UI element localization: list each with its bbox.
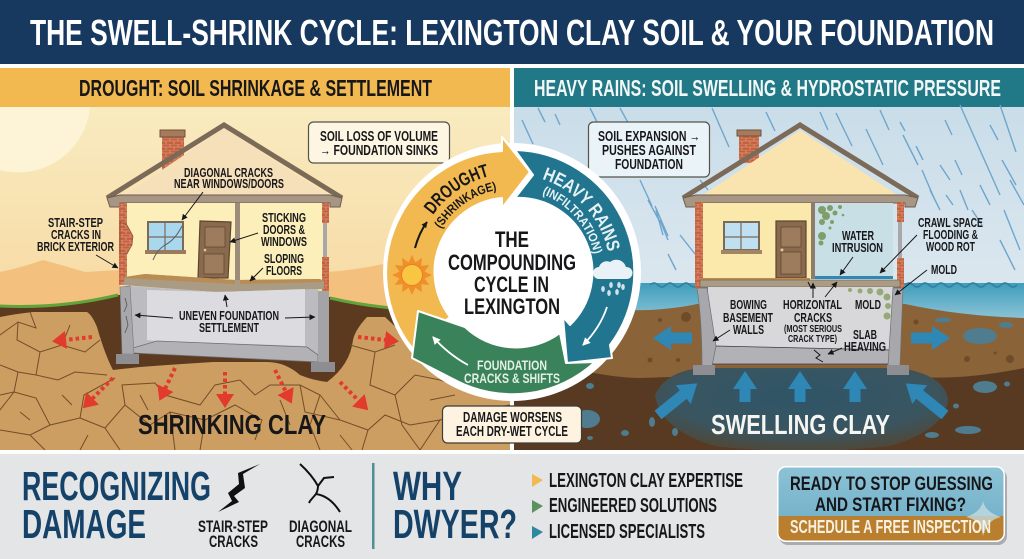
icon: diagonal crack: DIAGONAL	[289, 517, 352, 536]
house: drought	[107, 125, 342, 372]
label: diagonal cracks	[174, 165, 284, 220]
cycle direction arrows	[415, 222, 607, 365]
arrow: drought	[387, 136, 529, 346]
chimney	[160, 130, 185, 170]
label: mold exterior: MOLD	[931, 262, 957, 277]
callout: soil expansion: FOUNDATION	[615, 157, 683, 173]
label: crawl space flooding and wood rot: FLOODING &	[923, 227, 978, 242]
floor slab	[700, 278, 900, 287]
arrow: drought: DROUGHT	[424, 164, 486, 214]
arrow: heavy rains: (INFILTRATION)	[542, 186, 602, 254]
red shrinkage arrows	[65, 337, 386, 401]
icon: diagonal crack	[289, 464, 352, 551]
icon: diagonal crack: CRACKS	[296, 532, 345, 551]
swelling clay heading: SWELLING CLAY	[711, 409, 890, 440]
brick walls	[695, 202, 904, 289]
label: uneven foundation settlement	[135, 295, 315, 335]
window	[721, 222, 762, 254]
callout: damage worsens	[442, 406, 582, 443]
callout: damage worsens: EACH DRY-WET CYCLE	[456, 424, 568, 440]
panel: heavy rains	[514, 68, 1024, 451]
bullet list	[532, 470, 743, 543]
title banner	[0, 0, 1024, 64]
icon: sun	[392, 255, 432, 295]
door	[198, 221, 231, 278]
recognizing damage heading: DAMAGE	[22, 501, 146, 547]
icon: rain cloud	[593, 260, 633, 296]
cycle center title: COMPOUNDING	[448, 250, 576, 275]
label: sticking doors and windows: STICKING	[262, 210, 306, 225]
door	[776, 221, 806, 278]
attic and roof	[683, 125, 918, 207]
panel divider	[510, 68, 514, 454]
label: uneven foundation settlement: SETTLEMENT	[199, 320, 259, 335]
label: water intrusion	[832, 228, 883, 275]
label: stair-step cracks in brick exterior: CRACKS IN	[51, 227, 101, 242]
label: horizontal cracks: (MOST SERIOUS	[784, 323, 842, 335]
label: horizontal cracks: CRACK TYPE)	[788, 333, 837, 345]
compounding cycle diagram	[383, 136, 641, 401]
callout: damage worsens: DAMAGE WORSENS	[463, 410, 562, 426]
label: uneven foundation settlement: UNEVEN FOUNDATION	[179, 308, 279, 323]
arrow: foundation cracks and shifts	[412, 311, 595, 394]
label: mold exterior	[895, 262, 957, 295]
rainy sky background	[514, 105, 1024, 307]
label: horizontal cracks	[783, 282, 842, 345]
callout: soil expansion: PUSHES AGAINST	[602, 143, 696, 159]
label: diagonal cracks: DIAGONAL CRACKS	[184, 165, 273, 180]
sloping floor	[123, 274, 324, 292]
house: heavy rains	[683, 125, 918, 375]
arrow: foundation cracks and shifts: CRACKS & SHIFTS	[464, 370, 560, 386]
why dwyer heading: DWYER?	[393, 501, 517, 547]
arrow: heavy rains	[517, 151, 634, 362]
label: sloping floors	[250, 251, 304, 281]
label: sloping floors: FLOORS	[266, 263, 302, 278]
foundation	[116, 286, 335, 372]
callout: soil loss of volume: SOIL LOSS OF VOLUME	[320, 129, 438, 145]
label: bowing basement walls	[713, 297, 773, 341]
interior walls	[127, 203, 323, 281]
label: bowing basement walls: BOWING	[730, 297, 767, 312]
label: horizontal cracks: CRACKS	[794, 310, 832, 325]
label: stair-step cracks in brick exterior	[37, 215, 118, 268]
recognizing damage heading	[22, 463, 211, 547]
chimney	[737, 130, 761, 163]
callout: soil loss of volume	[308, 122, 450, 163]
label: diagonal cracks: NEAR WINDOWS/DOORS	[174, 176, 284, 191]
label: stair-step cracks in brick exterior: BRICK EXTERIOR	[37, 239, 114, 254]
bullet list: ENGINEERED SOLUTIONS	[549, 495, 717, 517]
label: crawl space flooding and wood rot: WOOD ROT	[926, 239, 975, 254]
label: sticking doors and windows	[230, 210, 307, 249]
call to action button: AND START FIXING?	[815, 494, 966, 516]
icon: stair-step crack	[198, 464, 268, 551]
cracked clay soil	[0, 295, 510, 450]
label: sticking doors and windows: DOORS &	[263, 222, 305, 237]
icon: stair-step crack: STAIR-STEP	[198, 517, 268, 536]
bottom band	[0, 450, 1024, 559]
label: crawl space flooding and wood rot: CRAWL SPACE	[918, 215, 983, 230]
label: slab heaving	[828, 327, 886, 354]
callout: soil expansion: SOIL EXPANSION →	[598, 129, 700, 145]
cycle center title: THE	[495, 227, 529, 252]
drought panel header: DROUGHT: SOIL SHRINKAGE & SETTLEMENT	[79, 75, 432, 101]
brick walls with stair-step crack	[119, 203, 329, 291]
flooded basement	[693, 282, 909, 375]
call to action button	[777, 466, 1007, 545]
label: bowing basement walls: WALLS	[733, 322, 764, 337]
label: bowing basement walls: BASEMENT	[723, 310, 773, 325]
label: slab heaving: SLAB	[853, 327, 877, 342]
arrow: drought: (SHRINKAGE)	[434, 182, 496, 229]
bullet list: LEXINGTON CLAY EXPERTISE	[549, 470, 743, 492]
panel: drought	[0, 68, 510, 450]
blue pressure arrows	[658, 338, 945, 415]
cycle center title: LEXINGTON	[464, 294, 560, 319]
icon: stair-step crack: CRACKS	[209, 532, 258, 551]
label: sticking doors and windows: WINDOWS	[261, 234, 307, 249]
callout: soil expansion	[588, 122, 710, 177]
window with crack	[145, 222, 186, 260]
cycle center title	[448, 227, 576, 319]
label: horizontal cracks: HORIZONTAL	[783, 297, 842, 312]
label: mold basement: MOLD	[855, 297, 881, 312]
heavy rains panel header	[514, 68, 1024, 107]
why dwyer heading: WHY	[393, 463, 462, 509]
arrow: heavy rains: HEAVY RAINS	[543, 167, 620, 251]
label: stair-step cracks in brick exterior: STAIR-STEP	[48, 215, 103, 230]
cycle center title: CYCLE IN	[474, 272, 549, 297]
bullet list: LICENSED SPECIALISTS	[549, 521, 705, 543]
swollen soil layers	[514, 304, 1024, 451]
label: slab heaving: HEAVING	[844, 339, 886, 354]
recognizing damage heading: RECOGNIZING	[22, 463, 211, 509]
callout: soil loss of volume: → FOUNDATION SINKS	[320, 143, 438, 159]
shrinking clay heading: SHRINKING CLAY	[138, 409, 326, 440]
drought panel header	[0, 68, 510, 107]
label: sloping floors: SLOPING	[264, 251, 304, 266]
label: crawl space flooding and wood rot	[880, 215, 983, 273]
arrow: foundation cracks and shifts: FOUNDATION	[477, 357, 547, 373]
drought sky background with sun	[0, 107, 510, 320]
interior rooms	[703, 203, 893, 279]
label: water intrusion: INTRUSION	[832, 240, 883, 255]
floodwater band	[514, 283, 1024, 323]
label: water intrusion: WATER	[842, 228, 874, 243]
attic and roof	[107, 125, 342, 207]
why dwyer heading	[393, 463, 517, 547]
